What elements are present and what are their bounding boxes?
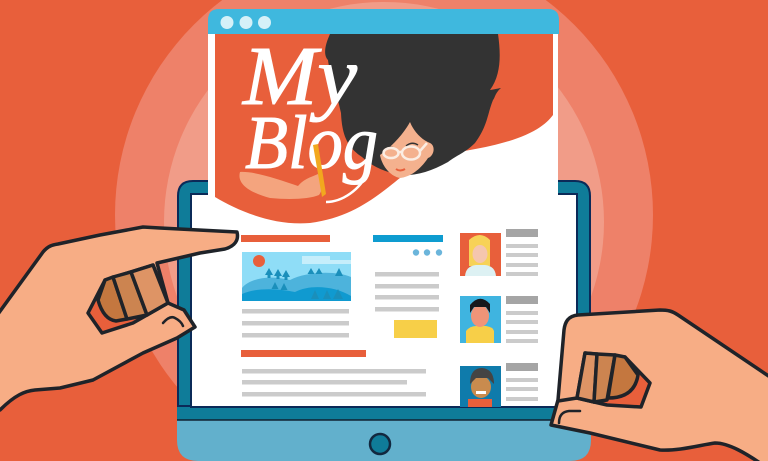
g tail flourish [326,172,368,202]
profile 2 [460,296,501,343]
text lines [242,309,349,338]
right hand [551,310,768,461]
browser title bar [208,9,559,34]
My Blog title: Blog [245,101,378,185]
browser window dots [220,16,271,29]
curled fingers [577,353,650,407]
lines [375,272,439,312]
browser page with header art [208,9,559,223]
orange header wave [215,34,553,223]
profile 3 [460,366,501,407]
writing arm and hand [239,144,326,199]
pencil [313,144,326,197]
profile text bars [506,229,538,401]
curled fingers [88,265,168,333]
dots [413,249,442,256]
My Blog title [242,30,378,185]
glasses [384,143,427,160]
tablet home button [370,434,390,454]
yellow button [394,320,437,338]
sidebar profiles [460,229,538,407]
thumb crease [163,317,183,326]
woman's face [380,122,434,178]
woman's hair [325,34,501,175]
thumb crease [559,411,580,423]
page content: middle column [373,235,443,338]
landscape image [242,252,351,301]
profile 1 [460,233,501,276]
thumb top line [558,398,577,401]
orange heading bar [241,235,330,242]
background circles [115,0,653,461]
section text lines [242,369,426,396]
My Blog title: My [242,30,358,123]
orange section bar [241,350,366,357]
page content: left column [241,235,426,396]
left hand [0,227,238,410]
tablet device [177,181,591,461]
